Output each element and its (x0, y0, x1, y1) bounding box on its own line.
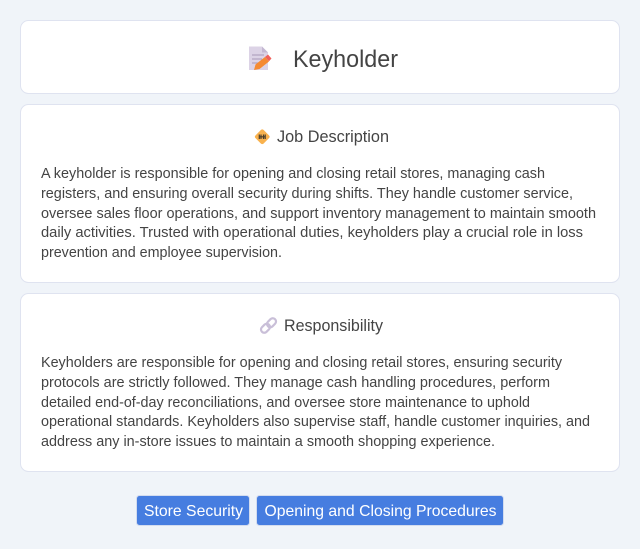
job description text: oversee sales floor operations, and support inventory management to maintain smooth (41, 206, 596, 222)
panel: responsibility (20, 294, 620, 472)
responsibility text: operational standards. Keyholders also supervise staff, handle customer inquiries, and (41, 414, 590, 430)
responsibility text: address any in-store issues to maintain a smooth shopping experience. (41, 434, 495, 450)
job description text (41, 166, 596, 261)
responsibility text: detailed end-of-day reconciliations, and oversee store maintenance to uphold (41, 395, 530, 411)
job description text: A keyholder is responsible for opening and closing retail stores, managing cash (41, 166, 545, 182)
icon: chain link (260, 317, 277, 334)
responsibility text: Keyholders are responsible for opening and closing retail stores, ensuring security (41, 355, 563, 371)
icon: construction diamond (254, 129, 270, 145)
panel: job description (20, 104, 620, 282)
panel: title header (20, 20, 620, 94)
heading: job description: Job Description (277, 127, 389, 146)
responsibility text (41, 355, 590, 450)
tag: Opening and Closing Procedures (256, 496, 504, 526)
job description text: daily activities. Trusted with operational duties, keyholders play a crucial role in loss (41, 225, 583, 241)
tag: Store Security (136, 496, 250, 526)
tag: Store Security: Store Security (144, 503, 243, 520)
title: Keyholder (293, 46, 398, 73)
responsibility text: protocols are strictly followed. They manage cash handling procedures, perform (41, 375, 550, 391)
job description text: registers, and ensuring overall security during shifts. They handle customer service, (41, 186, 573, 202)
job description text: prevention and employee supervision. (41, 245, 282, 261)
tag: Opening and Closing Procedures: Opening and Closing Procedures (264, 503, 496, 520)
icon: memo with pencil (249, 46, 272, 70)
heading: responsibility: Responsibility (284, 316, 384, 335)
